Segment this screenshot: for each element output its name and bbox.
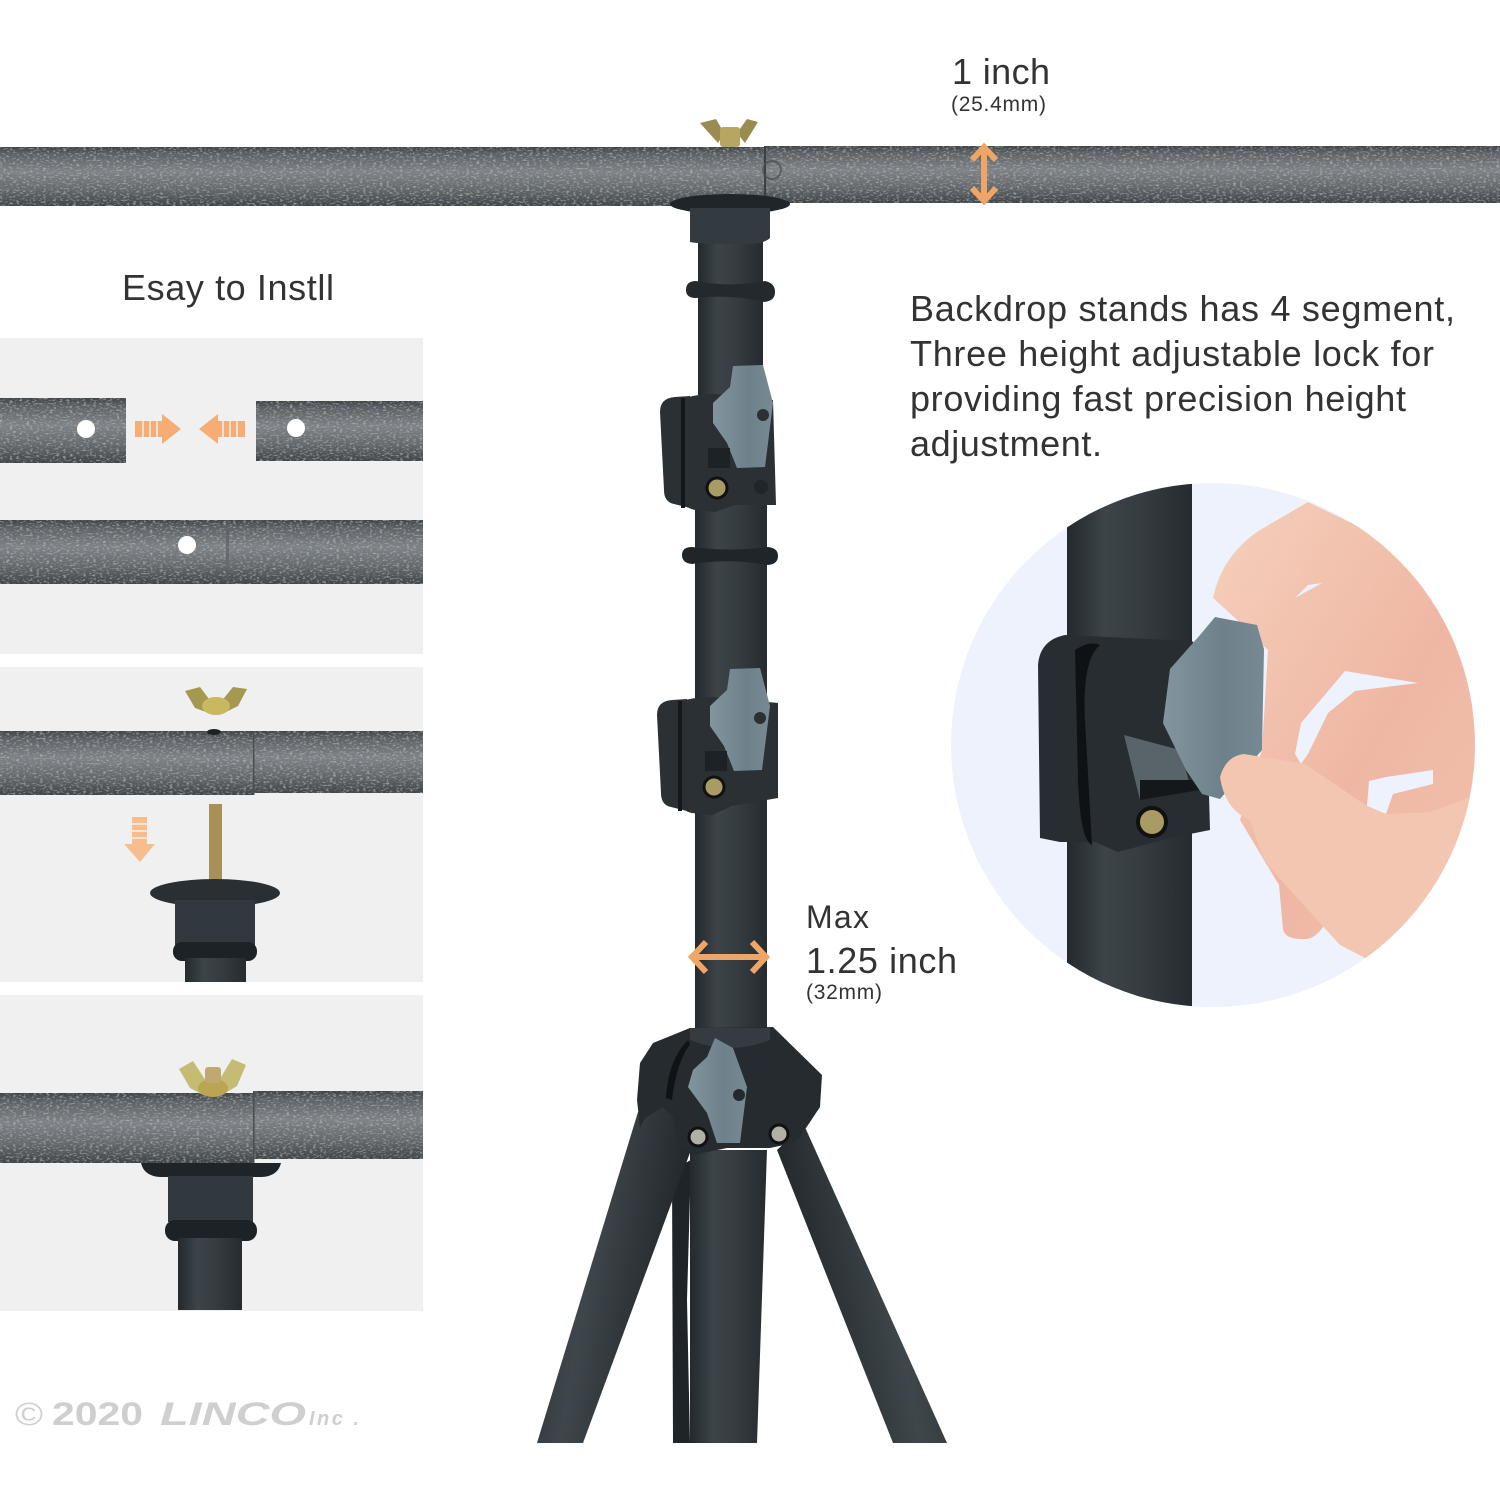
tripod leg joint (637, 1027, 822, 1155)
label: max 1.25 inch (806, 899, 957, 1004)
panel: circular detail of lock with hand (950, 480, 1490, 1010)
stand head (141, 1163, 281, 1310)
icon: orange arrow right (135, 414, 181, 444)
tripod legs (537, 1100, 947, 1443)
knob (1163, 617, 1264, 799)
label: max 1.25 inch: Max (806, 899, 869, 935)
heading: easy to install: Esay to Instll (122, 267, 334, 308)
hand fingers and palm (1213, 502, 1490, 960)
label: 1 inch: 1 inch (952, 51, 1050, 92)
thumb (1220, 754, 1490, 960)
watermark: Inc . (309, 1408, 359, 1430)
label: max 1.25 inch: 1.25 inch (806, 940, 957, 981)
icon: wing nut (185, 687, 247, 715)
icon: wing nut (179, 1059, 246, 1097)
dimension arrow: max diameter (692, 942, 766, 972)
text block: description: providing fast precision height (910, 378, 1406, 419)
icon: orange arrow left (199, 414, 245, 444)
label: max 1.25 inch: (32mm) (806, 981, 882, 1004)
panel: step 2 bolt and wing nut (0, 667, 423, 982)
text block: description: Backdrop stands has 4 segment, (910, 288, 1455, 329)
central stand pole (670, 194, 790, 1050)
watermark: 2020 (52, 1396, 143, 1432)
label: 1 inch (951, 51, 1050, 116)
text block: description: adjustment. (910, 423, 1102, 464)
stand head (150, 879, 280, 982)
lock body (1038, 635, 1210, 852)
dimension arrow: 1 inch (972, 147, 996, 201)
label: 1 inch: (25.4mm) (951, 93, 1046, 116)
middle height lock (657, 668, 778, 815)
watermark: © (15, 1396, 44, 1432)
icon: orange arrow down (124, 817, 155, 862)
horizontal crossbar (0, 146, 1500, 206)
panel: step 1 joining tubes (0, 338, 423, 654)
panel: step 3 assembled joint (0, 995, 423, 1311)
watermark: LINCO (160, 1396, 306, 1432)
text block: description: Three height adjustable lock for (910, 333, 1434, 374)
watermark (15, 1396, 359, 1432)
upper height lock (660, 365, 776, 512)
bolt (209, 804, 222, 886)
icon: wing nut on crossbar (700, 119, 758, 147)
text block: description (910, 288, 1455, 464)
